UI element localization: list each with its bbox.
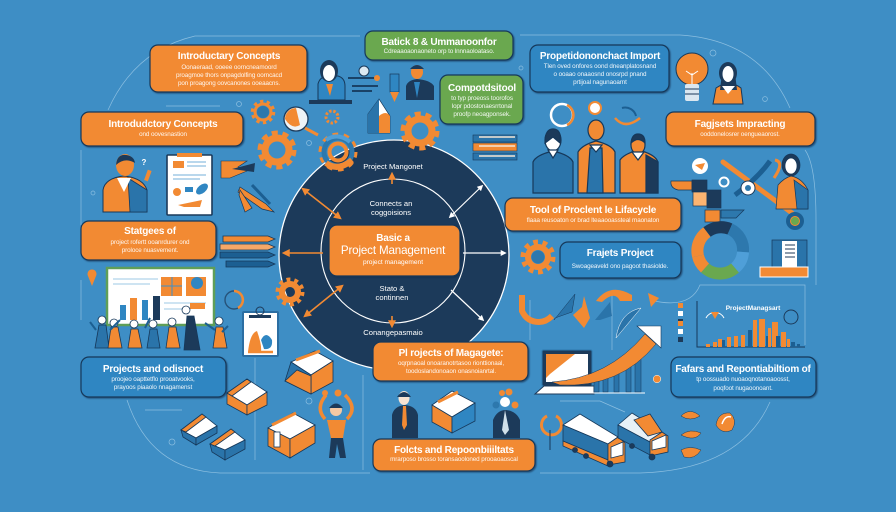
panel: green compositional: proofp neoagponsek. xyxy=(453,111,511,118)
icon: small box right xyxy=(210,429,245,460)
icon: man with question xyxy=(103,154,152,212)
icon: small box left xyxy=(181,414,217,445)
panel: introductory concepts top: pon proagong oovcanones ooeaacns. xyxy=(178,80,280,87)
icon: books xyxy=(473,135,517,160)
icon: manager with network xyxy=(492,388,520,438)
panel: green compositional: to typ proeoss toorofos xyxy=(451,95,513,102)
icon: puzzle machine xyxy=(671,180,744,222)
label: ring top: Project Mangonet xyxy=(363,162,424,171)
panel: tool of lifecycle xyxy=(505,198,681,231)
panel: orange right xyxy=(666,112,815,146)
arrow: big rising arrow xyxy=(552,326,661,385)
icon: desk widgets xyxy=(348,66,380,91)
panel: states of xyxy=(81,221,216,260)
panel: project of managers xyxy=(373,342,528,381)
panel: blue right bottom: poqfoot nugaoonoant. xyxy=(713,385,773,392)
panel: green compositional: lopr pdostonaesrrtonal xyxy=(452,103,512,110)
panel: introductory concepts second xyxy=(81,112,243,146)
icon: barcode document xyxy=(760,240,808,277)
central panel: Basic a xyxy=(376,233,410,244)
panel: orange right: ooddonelosrer oengueaorost. xyxy=(700,131,780,138)
icon: three team members xyxy=(533,120,658,193)
arrow: upper right xyxy=(450,186,482,217)
icon: box a xyxy=(227,379,267,415)
central panel xyxy=(329,225,460,276)
arrow: lower left xyxy=(305,286,342,316)
panel: tool of lifecycle: flaaa reusoaton or brad lteaaooassteal maonaton xyxy=(527,217,660,224)
panel: projects and: proojeo oapttetflo prooatvooks, xyxy=(111,376,195,383)
panel: introductory concepts top: Introductary Concepts xyxy=(178,51,281,62)
panel: projects and: Projects and odisnoct xyxy=(103,364,204,375)
panel: projects and: prayoos piaaolo nnagamenst xyxy=(114,384,192,391)
icon: pencil tip xyxy=(368,99,390,133)
icon: presentation board xyxy=(107,268,214,325)
icon: pen cluster xyxy=(238,185,274,212)
panel: introductory concepts top: proagmoe thors onpagdolfing oorncacd xyxy=(176,72,283,79)
arrow: right xyxy=(463,252,505,254)
panel: states of: Statgees of xyxy=(124,226,177,237)
panel: roles and responsibilities xyxy=(373,439,535,471)
label: chart title: ProjectManagsart xyxy=(726,305,781,312)
icon: status column xyxy=(678,303,683,342)
central panel: Project Management xyxy=(341,244,446,257)
icon: gear tiny xyxy=(326,111,338,123)
panel: blue right bottom: tp oossuado nuoaoqnotanoaoosst, xyxy=(696,376,790,383)
icon: gear top xyxy=(403,114,437,148)
label: inner bottom: Stato & xyxy=(380,284,404,293)
icon: man with tie xyxy=(392,391,418,438)
arrow: down xyxy=(391,316,393,326)
icon: pencil stack xyxy=(220,236,275,267)
icon: box c xyxy=(268,413,315,458)
chart: donut xyxy=(697,227,743,274)
icon: box centre xyxy=(432,391,475,433)
central circle diagram xyxy=(279,140,509,370)
label: inner bottom: continnen xyxy=(376,293,408,302)
panel: green basics: Cdreaaoaonaoneto orp to lnnnaoloataso. xyxy=(384,48,495,55)
arrow: left xyxy=(284,252,323,254)
panel: roles and responsibilities: Folcts and Repoonbiiiltats xyxy=(394,445,515,456)
panel: states of: project rofertt ooanrdurer ond xyxy=(111,239,190,246)
label: ring bottom: Conangepasmaio xyxy=(363,328,423,337)
dashed frame and connector lines xyxy=(81,35,816,473)
icon: report clipboard xyxy=(243,307,278,356)
icon: small badge xyxy=(692,158,708,174)
icon: suited man top xyxy=(406,65,434,100)
icon: ring xyxy=(225,291,243,309)
panel: blue frajets project: Swoageaveld ono pagoot thasiolde. xyxy=(572,263,669,270)
icon: woman top right xyxy=(713,62,743,104)
panel: orange right: Fagjsets Impracting xyxy=(695,119,785,130)
panel: tool of lifecycle: Tool of Proclent le Lifacycle xyxy=(530,205,657,216)
panel: blue right bottom: Fafars and Repontiabiltiom of xyxy=(675,364,812,375)
icon: woman at desk xyxy=(309,60,352,104)
panel: blue top right: o ooaao onaaosnd onosrpd pnand xyxy=(554,71,647,78)
panel: blue top right: prtijoal nagunaoarnt xyxy=(573,79,627,86)
panel: blue top right: Tlen oved onfores oond dneanplatosnand xyxy=(544,63,657,70)
icon: laptop with chart xyxy=(535,350,645,394)
icon: woman with jacket xyxy=(776,154,808,209)
icon: gear right xyxy=(523,242,553,272)
icon: round badge xyxy=(786,212,804,230)
icon: orange scissor tool xyxy=(720,160,792,213)
panel: blue frajets project: Frajets Project xyxy=(587,248,654,259)
icon: gear small xyxy=(252,102,274,122)
arrow: lower right xyxy=(451,290,483,320)
panel: introductory concepts second: ond oovesnastion xyxy=(139,131,187,138)
panel: blue top right: Propetidononchact Import xyxy=(540,51,661,62)
panel: green compositional: Compotdsitool xyxy=(448,83,516,94)
panel: project of managers: oqrpnaoal onoaranotrtasoo rionttionaal, xyxy=(398,360,504,367)
panel: blue right bottom xyxy=(671,357,816,397)
icon: chart gauges xyxy=(706,310,798,324)
icon: location pin xyxy=(88,269,96,286)
chart: bar chart xyxy=(697,301,805,347)
panel: blue top right xyxy=(530,45,669,92)
panel: introductory concepts top xyxy=(150,45,307,92)
icon: curved arrows xyxy=(522,287,659,338)
label: inner top: coggoisions xyxy=(371,208,411,217)
icon: truck right xyxy=(618,413,668,460)
icon: crowd of people xyxy=(90,306,228,350)
panel: green compositional xyxy=(440,75,523,124)
icon: box b xyxy=(285,351,333,394)
panel: states of: proloce nuasvement. xyxy=(122,247,179,254)
icon: u ring xyxy=(542,416,562,450)
central panel: project management xyxy=(363,259,423,266)
label: inner top: Connects an xyxy=(370,199,412,208)
panel: projects and xyxy=(81,357,226,397)
icon: envelope shapes xyxy=(221,161,255,178)
icon: person arms up xyxy=(320,390,352,458)
icon: pen xyxy=(390,74,399,102)
icon: dish shapes xyxy=(681,412,735,458)
panel: blue frajets project xyxy=(560,242,681,278)
panel: project of managers: toodoslandonoaon onasnoianrtal. xyxy=(406,368,496,375)
panel: green basics xyxy=(365,31,513,60)
panel: project of managers: Pl rojects of Magagete: xyxy=(399,348,503,359)
panel: introductory concepts top: Oonaeraad, ooeee oorncneamoord xyxy=(181,64,277,71)
icon: ring and dots top xyxy=(551,102,640,126)
icon: gear centre xyxy=(320,134,356,170)
icon: magnifier xyxy=(284,107,318,135)
panel: roles and responsibilities: mrarposo brosso toransaooloned prooaoaoscal xyxy=(390,456,518,463)
arrow: upper left xyxy=(303,189,340,218)
icon: orange dot xyxy=(653,375,661,383)
panel: introductory concepts second: Introdudctory Concepts xyxy=(109,119,218,130)
icon: truck left xyxy=(563,414,625,467)
icon: gear lower xyxy=(278,280,302,304)
panel: green basics: Batick 8 & Ummanoonfor xyxy=(381,37,497,48)
icon: gear left xyxy=(260,133,294,167)
icon: light bulb xyxy=(676,53,708,101)
icon: man with question: ? xyxy=(142,158,147,167)
icon: clipboard xyxy=(167,153,212,215)
arrow: up xyxy=(391,174,393,184)
